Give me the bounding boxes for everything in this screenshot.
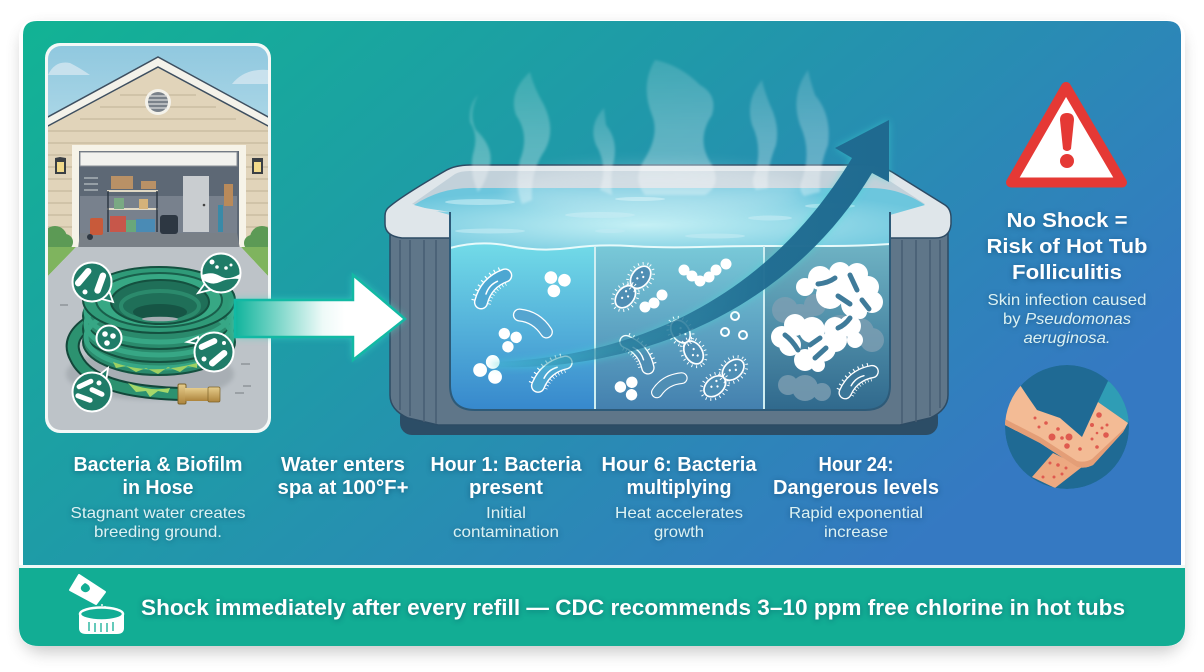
label: hour 1: Hour 1: Bacteria (430, 454, 582, 476)
hot tub (385, 165, 951, 435)
bacteria: hour 1 panel (473, 268, 573, 386)
label: hour 24: increase (824, 524, 888, 541)
garage door frame and interior (72, 145, 246, 249)
banner (19, 565, 1185, 646)
icon: coiled garden hose (66, 267, 235, 404)
steam (470, 60, 829, 204)
attic vent (145, 89, 171, 115)
water surface (414, 188, 925, 250)
label: bacteria and biofilm: Bacteria & Biofilm (74, 454, 242, 476)
callout: no shock warning: by Pseudomonas (1003, 311, 1131, 328)
callout: no shock warning: Folliculitis (1012, 262, 1122, 284)
icon: warning triangle (1011, 87, 1122, 182)
tub base (400, 405, 938, 435)
bacteria: hour 6 panel (607, 258, 752, 405)
bacteria: hour 24 biofilm (771, 262, 884, 401)
label: bacteria and biofilm: Stagnant water creates (70, 505, 246, 522)
label: hour 1: present (469, 477, 543, 499)
label: hour 6: Heat accelerates (615, 505, 743, 522)
roof (46, 57, 270, 127)
driveway (48, 247, 268, 430)
icon: chlorine shock being poured (70, 575, 124, 634)
label: water enters: spa at 100°F+ (278, 477, 408, 499)
panel: garage and hose (43, 43, 274, 433)
water cross-section panels (450, 243, 890, 412)
brass nozzle (178, 384, 220, 404)
callout: no shock warning: No Shock = (1006, 210, 1128, 232)
label: hour 1 (430, 454, 582, 541)
label: water enters (278, 454, 408, 499)
bushes (48, 226, 268, 247)
label: hour 24: Hour 24: (818, 454, 894, 476)
tub side panels (390, 232, 948, 425)
callout: no shock warning: aeruginosa. (1024, 330, 1110, 347)
callout: no shock warning (986, 210, 1148, 347)
wall lanterns (55, 157, 263, 174)
label: hour 1: Initial (486, 505, 526, 522)
tub rim (385, 165, 951, 238)
biofilm slime (113, 362, 197, 374)
label: hour 6: growth (654, 524, 704, 541)
sky (48, 46, 268, 116)
label: hour 24: Rapid exponential (789, 505, 923, 522)
icon: arms with rash (1000, 365, 1134, 489)
house wall (48, 66, 268, 260)
growth curve arrow (491, 120, 889, 367)
label: hour 24 (773, 454, 939, 541)
label: bacteria and biofilm (70, 454, 246, 541)
label: hour 24: Dangerous levels (773, 477, 939, 499)
label: water enters: Water enters (281, 454, 405, 476)
icon: bacteria bubbles on hose (72, 254, 240, 412)
banner text: Shock immediately after every refill — CDC recommends 3–10 ppm free chlorine in hot tubs (141, 595, 1125, 620)
lower hose loop (73, 322, 182, 394)
callout: no shock warning: Skin infection caused (988, 292, 1146, 309)
flow arrow: hose to spa (235, 275, 405, 360)
label: hour 6: multiplying (626, 477, 732, 499)
label: bacteria and biofilm: breeding ground. (94, 524, 222, 541)
label: hour 1: contamination (453, 524, 559, 541)
label: bacteria and biofilm: in Hose (122, 477, 194, 499)
garage contents (84, 176, 233, 240)
label: hour 6 (602, 454, 757, 541)
callout: no shock warning: Risk of Hot Tub (986, 236, 1148, 258)
lawn (48, 247, 268, 276)
label: hour 6: Hour 6: Bacteria (602, 454, 757, 476)
